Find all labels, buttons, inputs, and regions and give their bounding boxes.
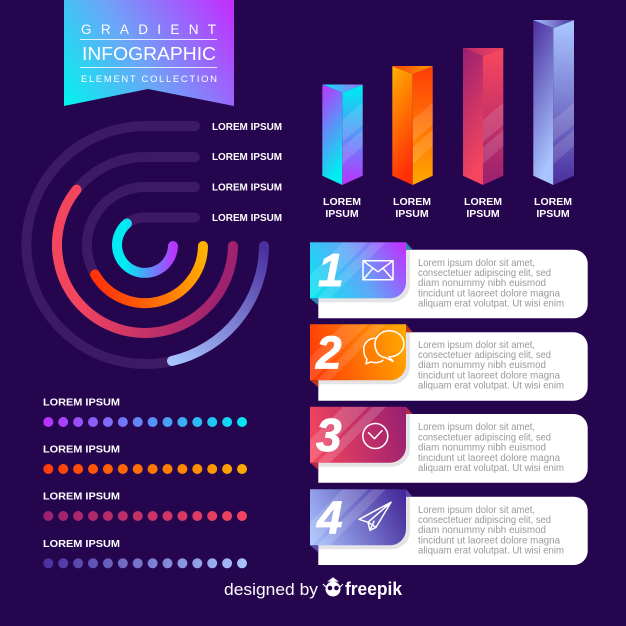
legend row 1 [43, 396, 247, 427]
bar 4 [533, 20, 574, 185]
legend row 3: LOREM IPSUM [43, 490, 120, 502]
radial chart labels: LOREM IPSUM [212, 182, 282, 194]
card 4: tincidunt ut laoreet dolore magna [418, 535, 560, 546]
bar labels: LOREM [534, 196, 572, 208]
radial chart labels: LOREM IPSUM [212, 121, 282, 133]
legend row 2: LOREM IPSUM [43, 444, 120, 456]
legend row 2 [43, 444, 247, 474]
card 1: consectetuer adipiscing elit, sed [418, 268, 551, 279]
bar 3 [463, 48, 503, 185]
card 1: tincidunt ut laoreet dolore magna [418, 288, 560, 299]
dot legend [43, 396, 247, 568]
bar labels: IPSUM [395, 208, 429, 220]
legend row 3 [43, 490, 247, 521]
bar labels: LOREM [323, 196, 361, 208]
bar labels: IPSUM [536, 208, 570, 220]
radial progress chart [26, 126, 264, 364]
bar labels: IPSUM [325, 208, 359, 220]
card 4: 4 [316, 491, 343, 543]
bar labels: LOREM [464, 196, 502, 208]
legend row 1: LOREM IPSUM [43, 396, 120, 408]
3D bar chart [322, 20, 574, 185]
card 3: tincidunt ut laoreet dolore magna [418, 453, 560, 464]
title banner: INFOGRAPHIC [82, 43, 216, 64]
card 3: aliquam erat volutpat. Ut wisi enim [418, 463, 564, 474]
card 2: aliquam erat volutpat. Ut wisi enim [418, 381, 564, 392]
bar labels: IPSUM [466, 208, 500, 220]
card 2: tincidunt ut laoreet dolore magna [418, 370, 560, 381]
card 3: Lorem ipsum dolor sit amet, [418, 422, 535, 433]
card 2 [287, 324, 588, 401]
card 4 [287, 489, 588, 565]
bar labels [323, 196, 572, 220]
card 1: Lorem ipsum dolor sit amet, [418, 258, 535, 269]
legend row 4: LOREM IPSUM [43, 538, 120, 550]
card 2: diam nonummy nibh euismod [418, 360, 546, 371]
card 1: diam nonummy nibh euismod [418, 278, 546, 289]
legend row 4 [43, 538, 247, 568]
card 1 [287, 242, 588, 318]
card 4: aliquam erat volutpat. Ut wisi enim [418, 546, 564, 557]
card 3: 3 [316, 409, 342, 461]
radial chart labels [212, 121, 282, 224]
footer attribution [224, 578, 403, 599]
card 2: consectetuer adipiscing elit, sed [418, 350, 551, 361]
icon: freepik mascot [323, 578, 343, 596]
bar 2 [392, 66, 433, 185]
footer attribution: designed by [224, 580, 319, 599]
footer attribution: freepik [345, 579, 403, 599]
card 2: Lorem ipsum dolor sit amet, [418, 340, 535, 351]
card 2: 2 [315, 326, 342, 378]
radial chart labels: LOREM IPSUM [212, 151, 282, 163]
card 1: aliquam erat volutpat. Ut wisi enim [418, 299, 564, 310]
card 3: diam nonummy nibh euismod [418, 443, 546, 454]
card 3: consectetuer adipiscing elit, sed [418, 432, 551, 443]
card 4: Lorem ipsum dolor sit amet, [418, 505, 535, 516]
bar labels: LOREM [393, 196, 431, 208]
card 1: 1 [318, 244, 344, 296]
card 4: consectetuer adipiscing elit, sed [418, 515, 551, 526]
card 4: diam nonummy nibh euismod [418, 525, 546, 536]
bar 1 [322, 84, 363, 185]
title banner [64, 0, 234, 106]
radial chart labels: LOREM IPSUM [212, 212, 282, 224]
title banner: ELEMENT COLLECTION [81, 74, 217, 85]
title banner: GRADIENT [81, 22, 216, 37]
card 3 [287, 407, 588, 483]
